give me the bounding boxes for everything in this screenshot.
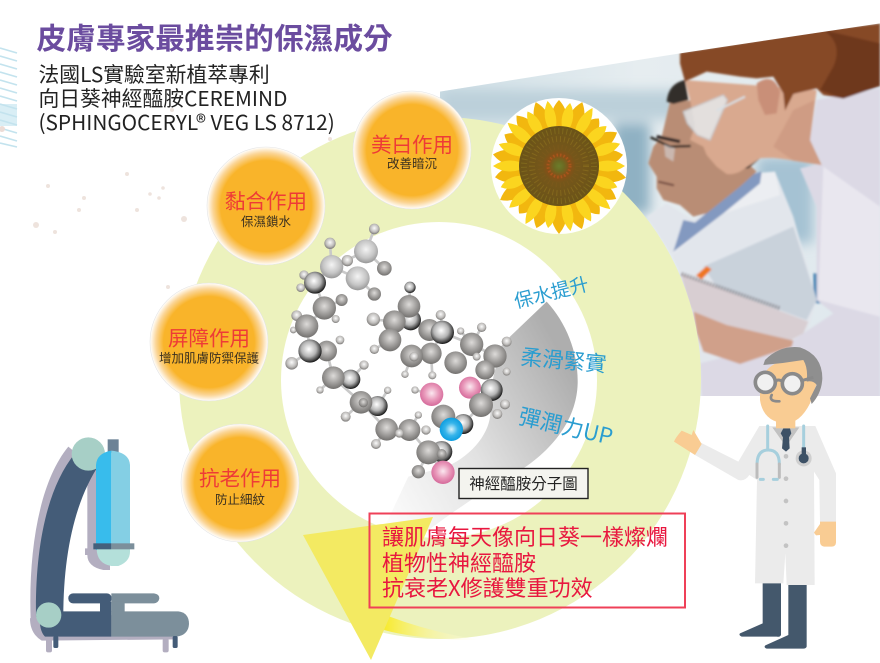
notebook: [681, 273, 808, 341]
circle: 屏障作用: 增加肌膚防禦保護: [159, 348, 259, 366]
callout: red box: [370, 514, 685, 608]
inner white circle: [281, 222, 597, 538]
title: 皮膚專家最推崇的保濕成分: [36, 15, 393, 58]
callout: red box: 讓肌膚每天像向日葵一樣燦爛: [382, 520, 668, 552]
grey swirl: [399, 302, 578, 531]
circle: 屏障作用: [150, 283, 268, 401]
molecule diagram: [285, 224, 512, 484]
circle: 抗老作用: 防止細紋: [215, 489, 265, 508]
man coat: [648, 174, 818, 304]
decorative stripes: top left: [0, 48, 17, 147]
woman hand: [693, 312, 793, 364]
yellow triangle: [303, 517, 433, 660]
yellow gradient swirl at ring bottom: [384, 616, 480, 640]
subtitle text block: 法國LS實驗室新植萃專利: [38, 58, 270, 88]
molecule caption box: [459, 468, 588, 498]
concentric ring background: [179, 117, 701, 639]
subtitle text block: 向日葵神經醯胺CEREMIND: [38, 82, 287, 112]
circle: 黏合作用: [207, 147, 325, 265]
doctor coat: [695, 426, 836, 585]
icon: microscope: [30, 437, 189, 652]
doctor hands: [674, 430, 702, 455]
circle: 黏合作用: 保濕鎖水: [241, 211, 291, 230]
circle: 抗老作用: 抗老作用: [199, 462, 281, 492]
molecule caption box: 神經醯胺分子圖: [469, 472, 578, 494]
circle: 抗老作用: [181, 424, 299, 542]
decorative dust dots: [33, 108, 332, 289]
photo: scientists in the laboratory: [440, 20, 880, 400]
circle: 屏障作用: 屏障作用: [168, 322, 250, 352]
icon: doctor character: [674, 347, 836, 649]
callout: red box: 植物性神經醯胺: [382, 546, 536, 578]
benefit label: 保水提升: 保水提升: [511, 269, 591, 314]
subtitle text block: [38, 58, 335, 136]
woman face: [685, 80, 822, 174]
doctor legs: [739, 583, 807, 649]
circle: 美白作用: 改善暗沉: [387, 153, 437, 172]
callout: red box: 抗衰老X修護雙重功效: [382, 571, 593, 603]
safety goggles: [683, 95, 727, 140]
subtitle text block: (SPHINGOCERYL® VEG LS 8712): [38, 106, 335, 136]
circle: 黏合作用: 黏合作用: [225, 184, 307, 214]
doctor head: [776, 418, 795, 428]
woman coat: [700, 88, 880, 400]
benefit label: 柔滑緊實: 柔滑緊實: [520, 340, 608, 379]
circle: 美白作用: [353, 91, 471, 209]
man head: [648, 100, 757, 217]
woman hair: [680, 23, 880, 111]
stethoscope: [757, 426, 804, 479]
circle: 美白作用: 美白作用: [371, 128, 453, 158]
sunflower photo: [491, 98, 627, 234]
benefit label: 彈潤力UP: 彈潤力UP: [516, 399, 616, 452]
